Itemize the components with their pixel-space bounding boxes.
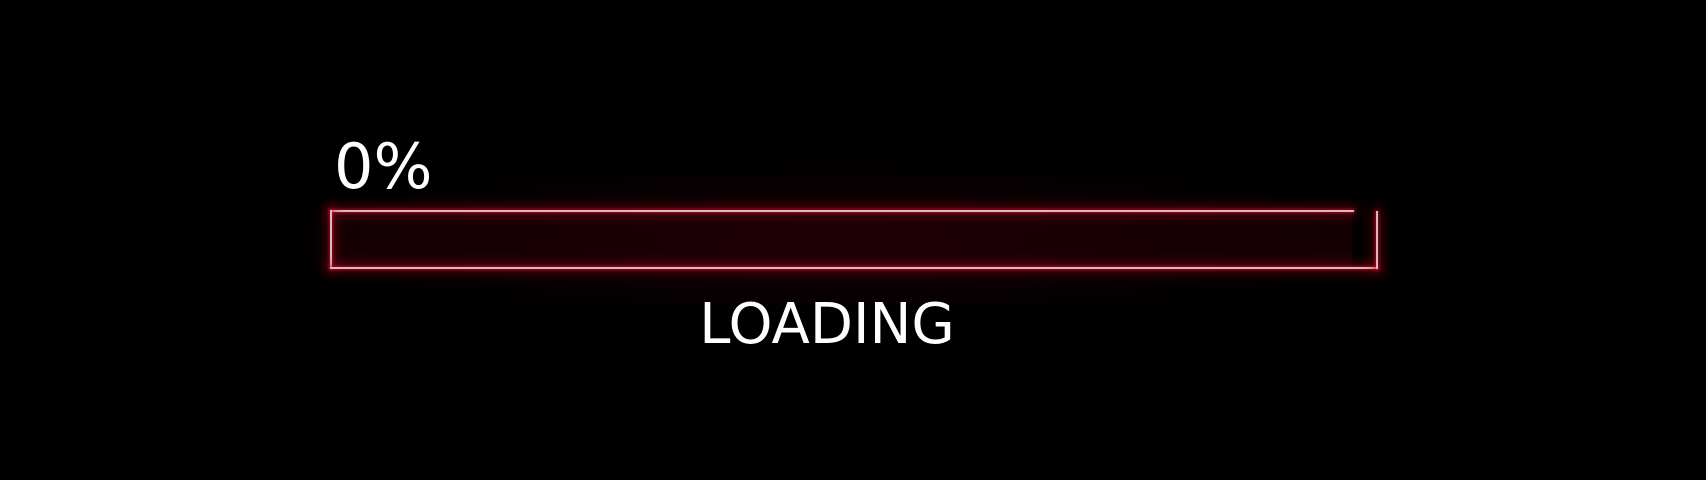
percentage label: 0% <box>334 130 432 203</box>
loading label: LOADING <box>699 292 955 357</box>
progress bar frame <box>318 198 1390 280</box>
